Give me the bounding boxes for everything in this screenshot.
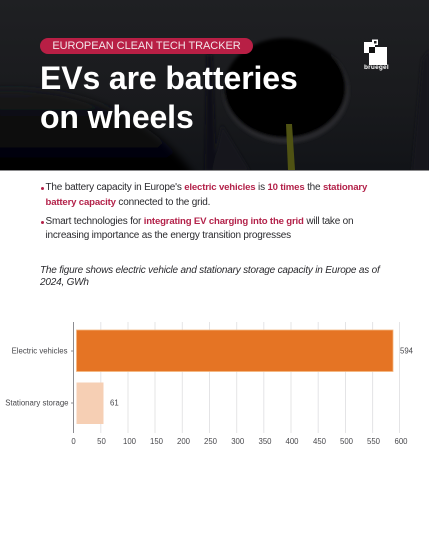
- figure caption: [40, 265, 381, 288]
- bar chart: 61: [110, 398, 119, 408]
- bullet 1: [41, 182, 368, 208]
- x axis labels: 600: [394, 437, 408, 446]
- title: EVs are batteries: [40, 60, 298, 96]
- figure caption: The figure shows electric vehicle and stationary storage capacity in Europe as of: [40, 265, 380, 276]
- bullet list: [41, 182, 368, 241]
- tag pill: EUROPEAN CLEAN TECH TRACKER: [52, 40, 241, 52]
- tag pill: [40, 38, 253, 54]
- bar chart: [5, 322, 414, 446]
- x axis labels: [71, 437, 408, 446]
- figure caption: 2024, GWh: [40, 276, 89, 288]
- logo: bruegel: bruegel: [364, 64, 389, 71]
- x axis labels: 0: [71, 437, 76, 446]
- title: on wheels: [40, 98, 194, 134]
- category labels: [5, 346, 68, 408]
- x axis labels: 550: [367, 437, 381, 446]
- bullet 1: The battery capacity in Europe's electric vehicles is 10 times the stationary: [46, 182, 367, 193]
- bullet 2: increasing importance as the energy transition progresses: [46, 230, 291, 241]
- x axis labels: 150: [150, 437, 164, 446]
- x axis labels: 450: [313, 437, 327, 446]
- header photo background: [0, 0, 429, 171]
- bullet 1: battery capacity connected to the grid.: [46, 196, 210, 208]
- axis: [71, 322, 74, 433]
- x axis labels: 50: [97, 437, 106, 446]
- x axis labels: 300: [231, 437, 245, 446]
- category labels: Electric vehicles: [12, 346, 68, 356]
- category labels: Stationary storage: [5, 398, 68, 408]
- bullet 2: [41, 216, 353, 241]
- bullet 2: Smart technologies for integrating EV charging into the grid will take on: [46, 216, 353, 226]
- x axis labels: 200: [177, 437, 191, 446]
- x axis labels: 100: [123, 437, 137, 446]
- title: [40, 60, 298, 134]
- value labels: 594: [400, 346, 414, 356]
- x axis labels: 500: [340, 437, 354, 446]
- logo: bruegel: [364, 40, 389, 71]
- x axis labels: 250: [204, 437, 218, 446]
- x axis labels: 350: [258, 437, 272, 446]
- x axis labels: 400: [285, 437, 299, 446]
- bar: stationary storage: [76, 382, 104, 424]
- bar: electric vehicles: [76, 330, 393, 372]
